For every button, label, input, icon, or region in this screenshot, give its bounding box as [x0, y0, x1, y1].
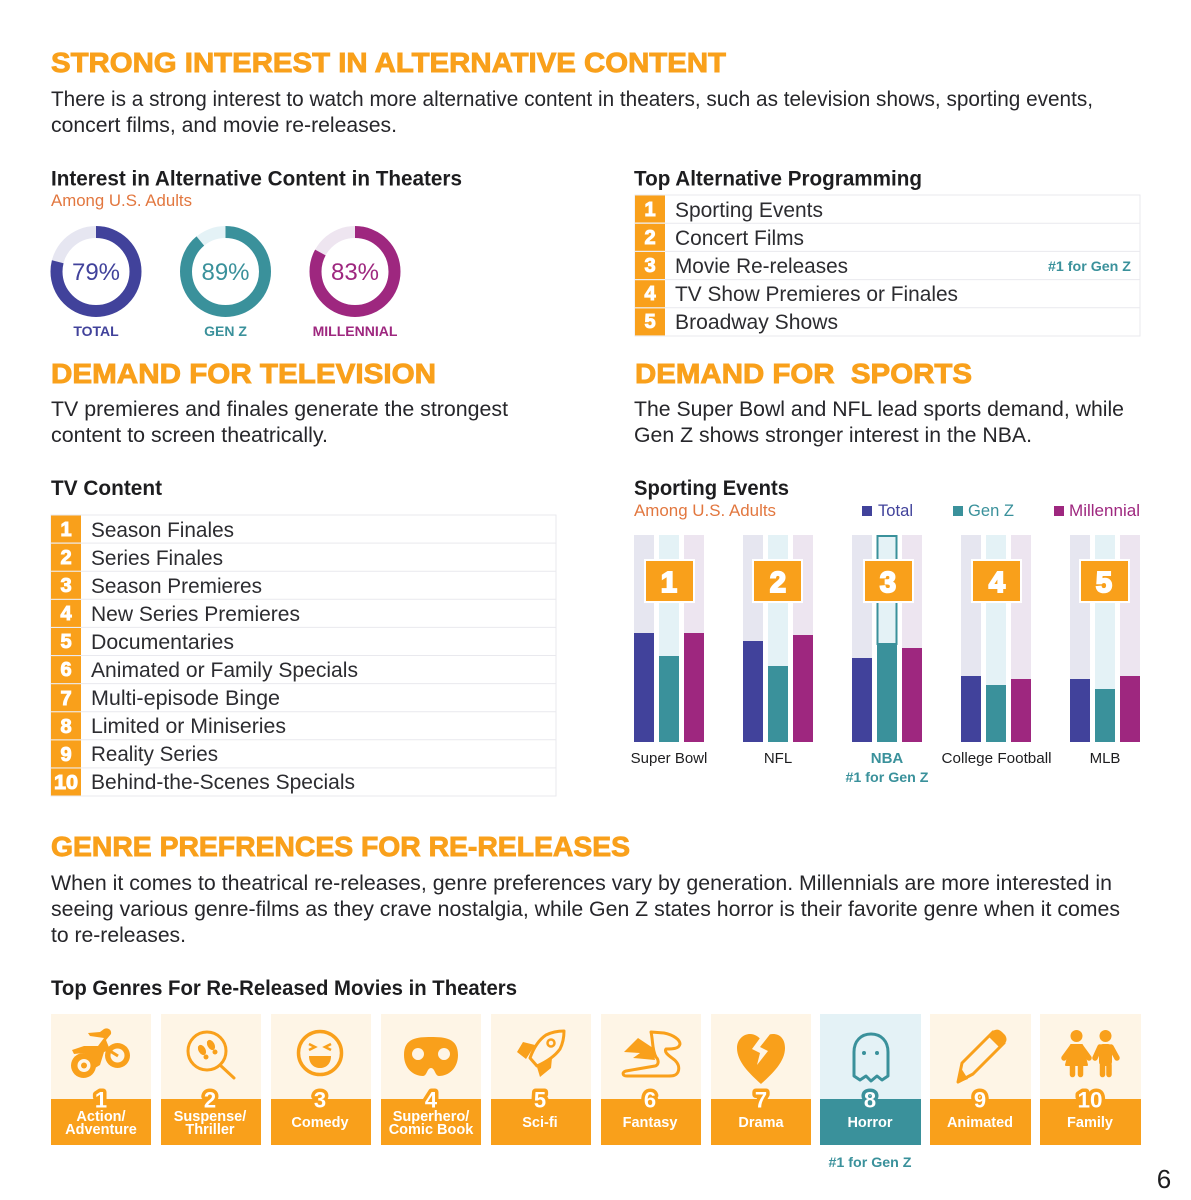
text: genre preferences: to re-releases.	[51, 924, 186, 947]
panel: tv content	[51, 477, 556, 796]
ranked list: programming: 1	[644, 199, 656, 221]
rank number: 8	[864, 1088, 876, 1112]
genre card: sci-fi: Sci-fi	[522, 1115, 558, 1131]
rank number: 2	[204, 1088, 216, 1112]
ranked list: tv content: Animated or Family Specials	[91, 659, 358, 682]
rank number: 5	[534, 1088, 546, 1112]
ranked list: tv content: New Series Premieres	[91, 603, 300, 626]
heading: top genres: Top Genres For Re-Released Movies in Theaters	[51, 977, 517, 1000]
donut: gen z 89%: GEN Z	[204, 323, 247, 339]
rank number: 10	[1078, 1088, 1102, 1112]
ranked list: tv content: Reality Series	[91, 743, 218, 766]
ranked list: programming: 4	[644, 283, 656, 305]
rank number: 7	[755, 1088, 767, 1112]
donut: millennial 83%: MILLENNIAL	[313, 323, 398, 339]
ranked list: tv content: 10	[54, 772, 78, 794]
genre card: sci-fi	[491, 1014, 591, 1145]
icon: mask	[404, 1037, 458, 1076]
donut: total 79%	[56, 232, 136, 339]
text: television	[51, 398, 508, 447]
donut: millennial 83%: 83%	[331, 259, 379, 286]
legend	[862, 502, 1140, 520]
ranked list: tv content: Documentaries	[91, 631, 234, 654]
heading: demand for sports: DEMAND FOR SPORTS	[635, 358, 972, 389]
genre card: suspense thriller: Suspense/	[174, 1109, 246, 1125]
icon: rocket	[517, 1031, 564, 1077]
donut: gen z 89%: 89%	[201, 259, 250, 286]
rank number: 1	[95, 1088, 107, 1112]
genre card: fantasy: Fantasy	[623, 1115, 677, 1131]
genre card: horror: Horror	[847, 1115, 893, 1131]
legend: Millennial	[1069, 502, 1140, 520]
text: sports: Gen Z shows stronger interest in the NBA.	[634, 424, 1032, 447]
genre card: action adventure: Action/	[76, 1109, 126, 1125]
bars: nfl	[743, 535, 813, 767]
text: genre preferences: seeing various genre-films as they crave nostalgia, while Gen Z states horror is their favorite genre when it comes	[51, 898, 1120, 921]
text: sports: The Super Bowl and NFL lead sports demand, while	[634, 398, 1124, 421]
ranked list: tv content: Limited or Miniseries	[91, 715, 286, 738]
ranked list: programming: Concert Films	[675, 227, 804, 250]
ranked list: programming: 3	[644, 255, 656, 277]
note: #1 for gen z: #1 for Gen Z	[828, 1154, 912, 1170]
genre card: superhero comic book: Superhero/	[393, 1109, 469, 1125]
genre card: drama: Drama	[738, 1115, 785, 1131]
bars: nfl: NFL	[764, 750, 792, 767]
page number: 6	[1157, 1164, 1171, 1194]
title: STRONG INTEREST IN ALTERNATIVE CONTENT	[51, 47, 726, 78]
genre card: suspense thriller	[161, 1014, 261, 1145]
bars: college football: 4	[989, 567, 1005, 599]
bars: super bowl	[631, 535, 707, 767]
ranked list: tv content: 6	[60, 659, 72, 681]
panel: interest donuts	[51, 168, 462, 339]
icon: children	[1064, 1030, 1117, 1074]
bars: mlb	[1070, 535, 1140, 767]
heading: demand for television: DEMAND FOR TELEVISION	[51, 358, 436, 389]
icon: magnifying glass	[188, 1032, 234, 1078]
bars: mlb: 5	[1096, 567, 1112, 599]
icon: ghost	[854, 1034, 888, 1081]
genre card: family	[1040, 1014, 1141, 1145]
ranked list: programming: Sporting Events	[675, 199, 823, 222]
bars: college football	[942, 535, 1052, 767]
ranked list: tv content: 1	[60, 519, 72, 541]
ranked list: programming: 5	[644, 311, 656, 333]
heading: sporting events: Sporting Events	[634, 477, 789, 500]
bars: super bowl: 1	[661, 567, 677, 599]
legend: Gen Z	[968, 502, 1014, 520]
icon: motorcycle	[71, 1028, 130, 1078]
genre card: superhero comic book: Comic Book	[389, 1122, 474, 1138]
genre card: animated	[930, 1014, 1031, 1145]
panel: sporting events chart	[631, 477, 1140, 785]
ranked list: tv content: Behind-the-Scenes Specials	[91, 771, 355, 794]
genre card: family: Family	[1067, 1115, 1113, 1131]
bars: college football: College Football	[942, 750, 1052, 767]
ranked list: tv content: 3	[60, 575, 72, 597]
ranked list: programming: #1 for Gen Z	[1048, 258, 1131, 274]
rank number: 3	[314, 1088, 326, 1112]
ranked list: tv content: 2	[60, 547, 72, 569]
genre card: suspense thriller: Thriller	[185, 1122, 235, 1138]
donut: gen z 89%	[186, 232, 265, 339]
ranked list: programming: TV Show Premieres or Finales	[675, 283, 958, 306]
subheading: among adults: Among U.S. Adults	[634, 502, 776, 520]
ranked list: programming: Movie Re-releases	[675, 255, 848, 278]
ranked list: tv content: 9	[60, 744, 72, 766]
heading: tv content: TV Content	[51, 477, 162, 500]
heading: top alternative programming: Top Alternative Programming	[634, 168, 922, 190]
bars: nfl: 2	[770, 567, 786, 599]
bars: super bowl: Super Bowl	[631, 750, 707, 767]
heading: genre preferences: GENRE PREFRENCES FOR RE-RELEASES	[51, 831, 630, 862]
bars: mlb: MLB	[1090, 750, 1120, 767]
donut: total 79%: TOTAL	[73, 323, 119, 339]
intro text: concert films, and movie re-releases.	[51, 114, 397, 137]
genre card: fantasy	[601, 1014, 701, 1145]
text: genre preferences	[51, 872, 1120, 947]
heading: interest: Interest in Alternative Content in Theaters	[51, 168, 462, 190]
ranked list: tv content: 4	[60, 603, 72, 625]
rank number: 4	[425, 1088, 438, 1112]
ranked list: programming	[635, 195, 1140, 336]
donut: total 79%: 79%	[72, 259, 120, 286]
genre card: action adventure	[51, 1014, 151, 1145]
icon: broken heart	[737, 1033, 785, 1084]
genre card: superhero comic book	[381, 1014, 481, 1145]
panel: top alternative programming	[634, 168, 1140, 336]
ranked list: tv content: Season Finales	[91, 519, 234, 542]
genre card: comedy	[271, 1014, 371, 1145]
ranked list: tv content: 7	[60, 688, 72, 710]
icon: pencil	[958, 1030, 1006, 1083]
genre card: horror	[820, 1014, 921, 1170]
intro text	[51, 88, 1093, 137]
ranked list: tv content: 8	[60, 716, 72, 738]
ranked list: programming: 2	[644, 227, 656, 249]
genre card: action adventure: Adventure	[65, 1122, 137, 1138]
ranked list: tv content: Multi-episode Binge	[91, 687, 280, 710]
genre card: animated: Animated	[947, 1115, 1013, 1131]
ranked list: tv content: 5	[60, 631, 72, 653]
subheading: among adults: Among U.S. Adults	[51, 192, 192, 210]
icon: dragon	[623, 1032, 680, 1076]
text: television: content to screen theatrically.	[51, 424, 328, 447]
text: sports	[634, 398, 1124, 447]
ranked list: tv content: Season Premieres	[91, 575, 262, 598]
bars: nba: #1 for Gen Z	[846, 769, 929, 785]
ranked list: tv content: Series Finales	[91, 547, 223, 570]
bars: nba: NBA	[871, 750, 903, 767]
rank number: 6	[644, 1088, 656, 1112]
ranked list: tv content	[51, 515, 556, 796]
genre card: comedy: Comedy	[291, 1115, 349, 1131]
text: genre preferences: When it comes to theatrical re-releases, genre preferences vary by generation. Millennials are more interested in	[51, 872, 1112, 895]
intro text: There is a strong interest to watch more alternative content in theaters, such as television shows, sporting events,	[51, 88, 1093, 111]
donut: millennial 83%	[313, 232, 398, 339]
icon: laughing face	[298, 1032, 342, 1074]
rank number: 9	[974, 1088, 986, 1112]
bars: nba	[846, 535, 929, 785]
ranked list: programming: Broadway Shows	[675, 311, 838, 334]
genre card: drama	[711, 1014, 811, 1145]
text: television: TV premieres and finales generate the strongest	[51, 398, 508, 421]
bars: nba: 3	[880, 567, 896, 599]
legend: Total	[878, 502, 913, 520]
